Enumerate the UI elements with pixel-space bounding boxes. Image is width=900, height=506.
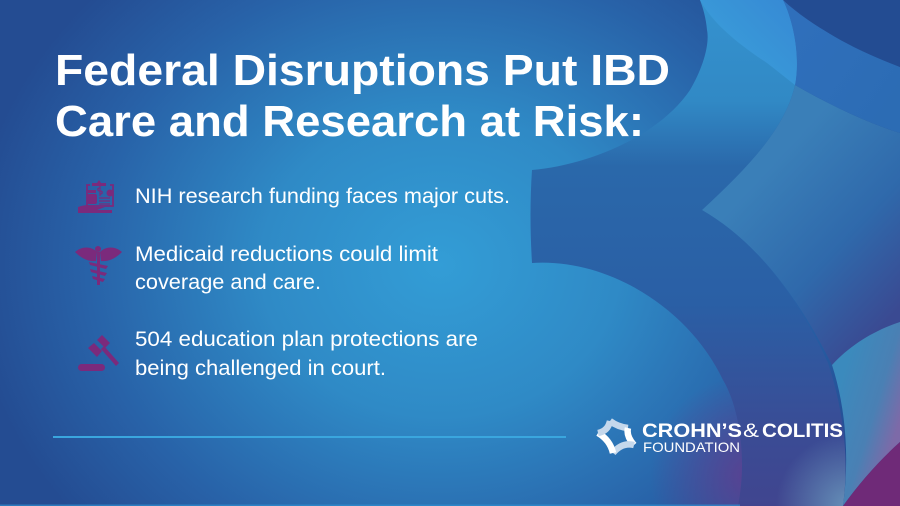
list item: Medicaid: Medicaid reductions could limit xyxy=(135,243,438,266)
icon: caduceus xyxy=(75,246,122,285)
decorative shape: bottom right purple corner xyxy=(843,442,900,506)
decorative shape: top right bands xyxy=(700,0,900,133)
list item: NIH research: NIH research funding faces major cuts. xyxy=(135,185,510,208)
list item: 504 plans: being challenged in court. xyxy=(135,357,386,380)
list item: 504 plans: 504 education plan protections are xyxy=(135,328,478,351)
logo wordmark: & xyxy=(743,420,759,442)
title xyxy=(55,46,670,146)
icon: gavel xyxy=(78,335,119,371)
list item: Medicaid xyxy=(135,243,438,294)
logo wordmark: COLITIS xyxy=(762,420,843,442)
logo wordmark: CROHN’S xyxy=(642,420,742,442)
divider line xyxy=(53,436,566,438)
list item: Medicaid: coverage and care. xyxy=(135,271,321,294)
logo wordmark: FOUNDATION xyxy=(643,439,740,455)
list item: 504 plans xyxy=(135,328,478,380)
decorative shape: lower right teal blob xyxy=(832,322,900,506)
decorative shape: large numeral curve xyxy=(530,0,848,506)
decorative shape: lower left purple haze xyxy=(650,375,765,506)
bottom edge line xyxy=(0,504,740,506)
title: Care and Research at Risk: xyxy=(55,97,644,146)
icon: clipboard with money and hand xyxy=(78,180,114,213)
logo mark xyxy=(598,421,634,453)
decorative shape: right field xyxy=(702,85,900,365)
logo: Crohn's & Colitis Foundation xyxy=(598,420,843,455)
title: Federal Disruptions Put IBD xyxy=(55,46,670,95)
logo wordmark xyxy=(642,420,843,455)
